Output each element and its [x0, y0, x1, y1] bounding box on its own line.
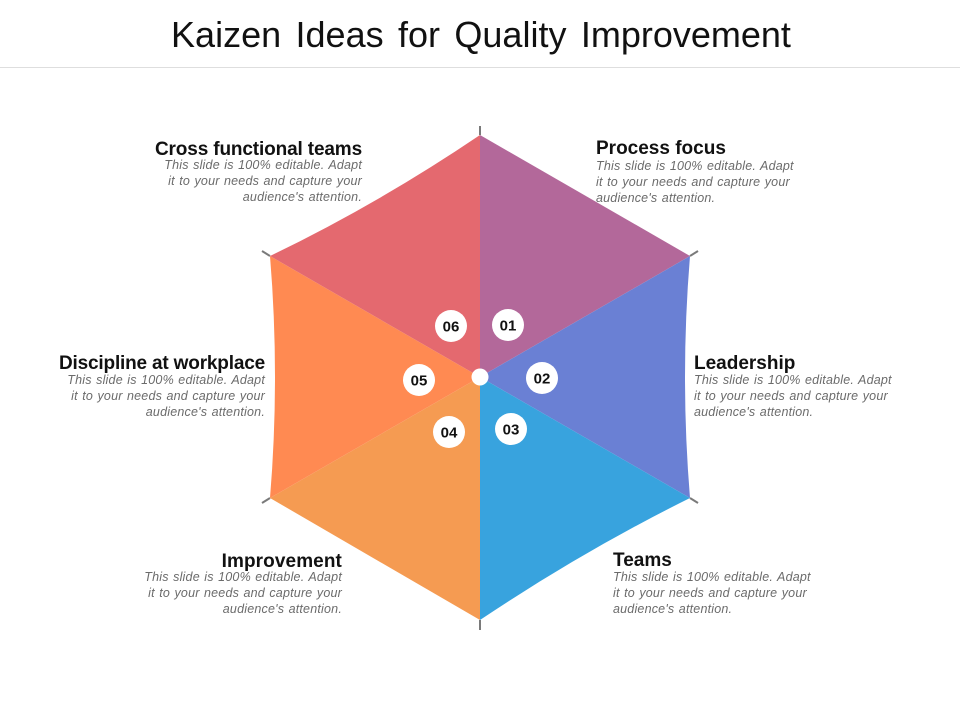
- text block: Leadership: it to your needs and capture your: [694, 389, 888, 403]
- badge 01: 01: [500, 318, 516, 334]
- badge 02: [526, 362, 558, 394]
- text block: Process focus: This slide is 100% editable. Adapt: [596, 159, 794, 173]
- text block: Teams: Teams: [613, 550, 672, 571]
- badge 05: [403, 364, 435, 396]
- text block: Discipline at workplace: This slide is 100% editable. Adapt: [67, 373, 265, 387]
- text block: Process focus: [596, 138, 794, 205]
- badge 04: 04: [441, 424, 458, 442]
- text block: Improvement: This slide is 100% editable. Adapt: [144, 570, 342, 584]
- text block: Leadership: Leadership: [694, 353, 795, 374]
- title: Kaizen Ideas for Quality Improvement: [171, 14, 791, 55]
- badge 03: 03: [503, 422, 519, 438]
- text block: Discipline at workplace: Discipline at workplace: [59, 353, 265, 374]
- text block: Teams: This slide is 100% editable. Adapt: [613, 570, 811, 584]
- text block: Leadership: audience's attention.: [694, 405, 813, 419]
- text block: Teams: audience's attention.: [613, 602, 732, 616]
- segment 06: [270, 135, 480, 377]
- text block: Leadership: This slide is 100% editable. Adapt: [694, 373, 892, 387]
- text block: Improvement: Improvement: [222, 551, 342, 572]
- text block: Improvement: [144, 551, 342, 616]
- badge 04: [433, 416, 465, 448]
- text block: Cross functional teams: Cross functional teams: [155, 139, 362, 160]
- text block: Discipline at workplace: it to your needs and capture your: [71, 389, 265, 403]
- text block: Discipline at workplace: audience's attention.: [146, 405, 265, 419]
- segment 04: [270, 377, 480, 620]
- badge 06: [435, 310, 467, 342]
- segment 03: [480, 377, 690, 620]
- text block: Discipline at workplace: [59, 353, 266, 419]
- text block: Cross functional teams: [155, 139, 362, 204]
- badge 03: [495, 413, 527, 445]
- text block: Improvement: it to your needs and capture your: [148, 586, 342, 600]
- text block: Teams: it to your needs and capture your: [613, 586, 807, 600]
- text block: Process focus: Process focus: [596, 138, 726, 159]
- segment 05: [270, 256, 480, 498]
- text block: Teams: [613, 550, 811, 616]
- text block: Cross functional teams: audience's attention.: [243, 190, 362, 204]
- badge 01: [492, 309, 524, 341]
- text block: Improvement: audience's attention.: [223, 602, 342, 616]
- segment 01: [480, 135, 690, 377]
- text block: Process focus: audience's attention.: [596, 191, 715, 205]
- badge 05: 05: [411, 372, 427, 390]
- text block: Cross functional teams: it to your needs and capture your: [168, 174, 362, 188]
- text block: Process focus: it to your needs and capture your: [596, 175, 790, 189]
- text block: Leadership: [694, 353, 892, 419]
- segment 02: [480, 256, 690, 498]
- badge 06: 06: [443, 318, 459, 336]
- badge 02: 02: [534, 370, 550, 388]
- text block: Cross functional teams: This slide is 100% editable. Adapt: [164, 158, 362, 172]
- centre dot: [472, 368, 488, 386]
